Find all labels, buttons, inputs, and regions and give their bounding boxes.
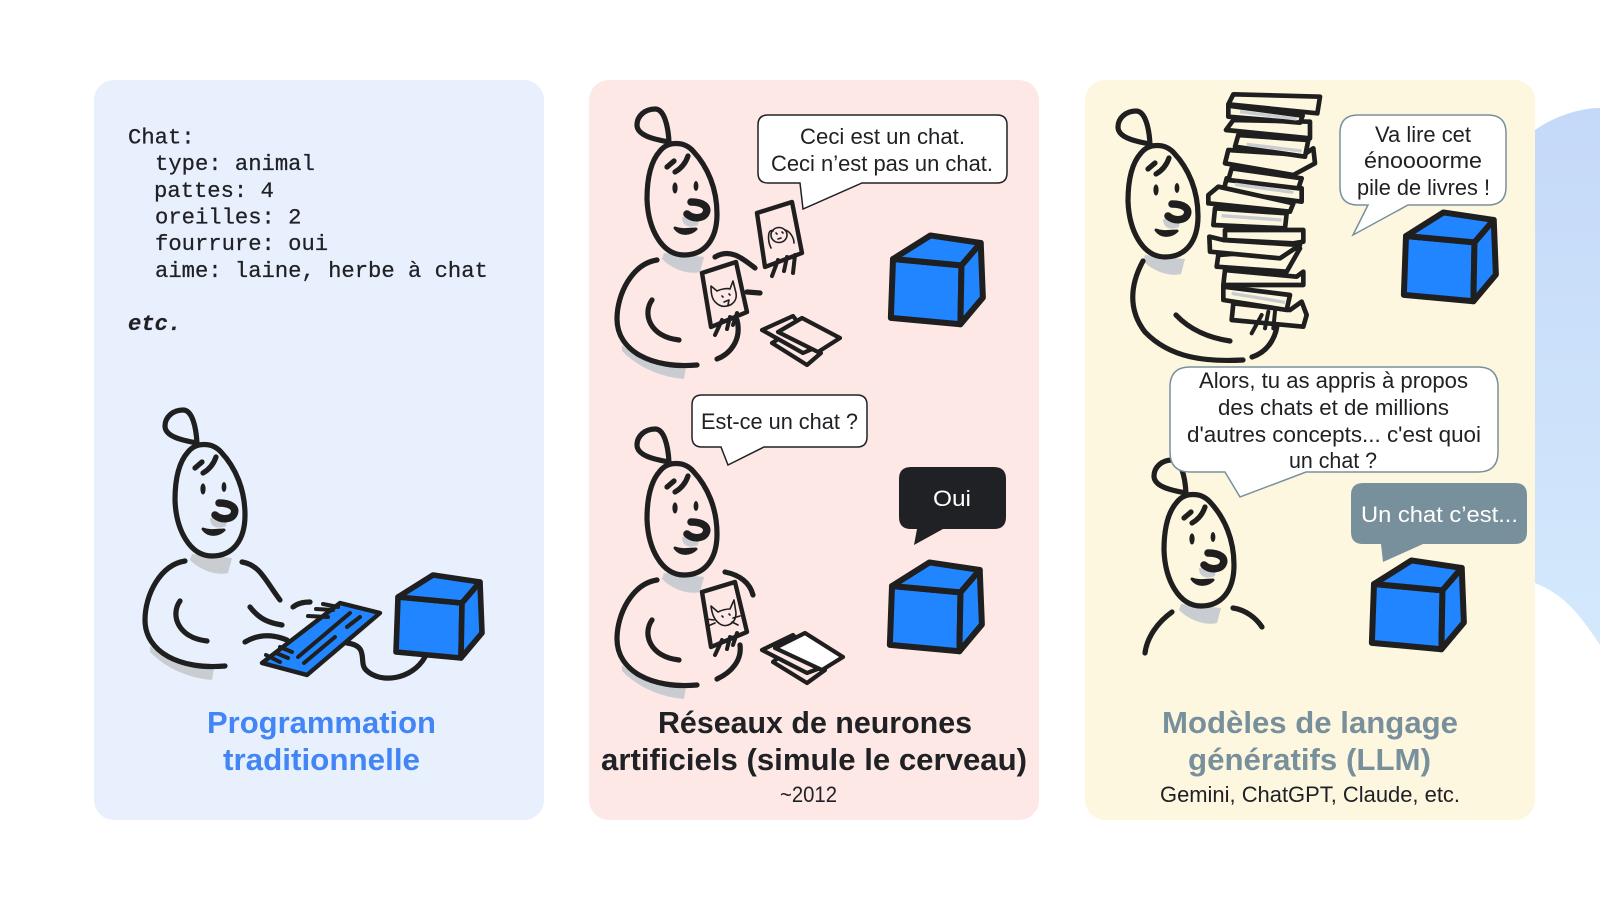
code block: fourrure: oui	[155, 232, 328, 257]
title: réseaux de neurones: artificiels (simule le cerveau)	[601, 742, 1027, 777]
icon: cube	[1372, 560, 1464, 649]
title: modèles de langage: génératifs (LLM)	[1188, 742, 1431, 777]
speech bubble: est-ce un chat: Est-ce un chat ?	[701, 409, 858, 434]
speech bubble: ceci est un chat	[758, 115, 1007, 209]
speech bubble: un chat c'est	[1351, 483, 1527, 562]
icon: cube	[890, 562, 982, 651]
card: cat	[702, 262, 747, 335]
card stack	[762, 633, 843, 683]
speech bubble: alors	[1170, 367, 1498, 497]
speech bubble: oui	[899, 467, 1006, 545]
background blob	[1535, 108, 1600, 645]
speech bubble: va lire	[1340, 115, 1506, 235]
panel: programmation traditionnelle	[94, 80, 544, 820]
icon: cube	[1404, 212, 1496, 301]
speech bubble: est-ce un chat	[692, 395, 867, 465]
illustration: person typing on keyboard	[145, 410, 482, 680]
speech bubble: va lire: énoooorme	[1364, 148, 1482, 173]
speech bubble: un chat c'est: Un chat c’est...	[1361, 502, 1518, 527]
title: réseaux de neurones: Réseaux de neurones	[658, 705, 972, 740]
title: réseaux de neurones	[601, 705, 1027, 807]
title: programmation: traditionnelle	[223, 742, 420, 777]
title: modèles de langage	[1160, 705, 1460, 807]
title: programmation	[207, 705, 436, 777]
code block: etc.	[128, 312, 181, 337]
card: dog	[757, 202, 802, 276]
code block	[128, 126, 488, 337]
illustration: person asking	[617, 429, 843, 699]
code block: pattes: 4	[154, 179, 274, 204]
speech bubble: alors: d'autres concepts... c'est quoi	[1187, 422, 1481, 447]
icon: cube computer	[396, 575, 482, 658]
title: programmation: Programmation	[207, 705, 436, 740]
title: modèles de langage: Modèles de langage	[1162, 705, 1458, 740]
card: cat	[702, 582, 747, 655]
code block: Chat:	[128, 126, 195, 150]
speech bubble: alors: Alors, tu as appris à propos	[1199, 368, 1468, 393]
panel: réseaux de neurones	[589, 80, 1039, 820]
code block: type: animal	[155, 152, 315, 177]
illustration: person carrying books	[1118, 94, 1320, 360]
speech bubble: ceci est un chat: Ceci est un chat.	[800, 124, 965, 149]
title: modèles de langage: Gemini, ChatGPT, Claude, etc.	[1160, 782, 1460, 807]
speech bubble: oui: Oui	[933, 486, 971, 511]
speech bubble: alors: des chats et de millions	[1218, 395, 1449, 420]
speech bubble: alors: un chat ?	[1289, 448, 1377, 473]
code block: aime: laine, herbe à chat	[155, 259, 488, 284]
code block: oreilles: 2	[155, 206, 301, 230]
title: réseaux de neurones: ~2012	[780, 782, 837, 807]
stack of books	[1208, 94, 1320, 333]
panel: modèles de langage	[1085, 80, 1535, 820]
speech bubble: va lire: pile de livres !	[1357, 175, 1490, 200]
speech bubble: va lire: Va lire cet	[1375, 122, 1471, 147]
card stack	[762, 316, 840, 365]
speech bubble: ceci est un chat: Ceci n’est pas un chat.	[771, 151, 993, 176]
illustration: person training with cards	[617, 109, 840, 379]
icon: cube	[891, 235, 983, 324]
illustration: person asking	[1145, 460, 1262, 653]
